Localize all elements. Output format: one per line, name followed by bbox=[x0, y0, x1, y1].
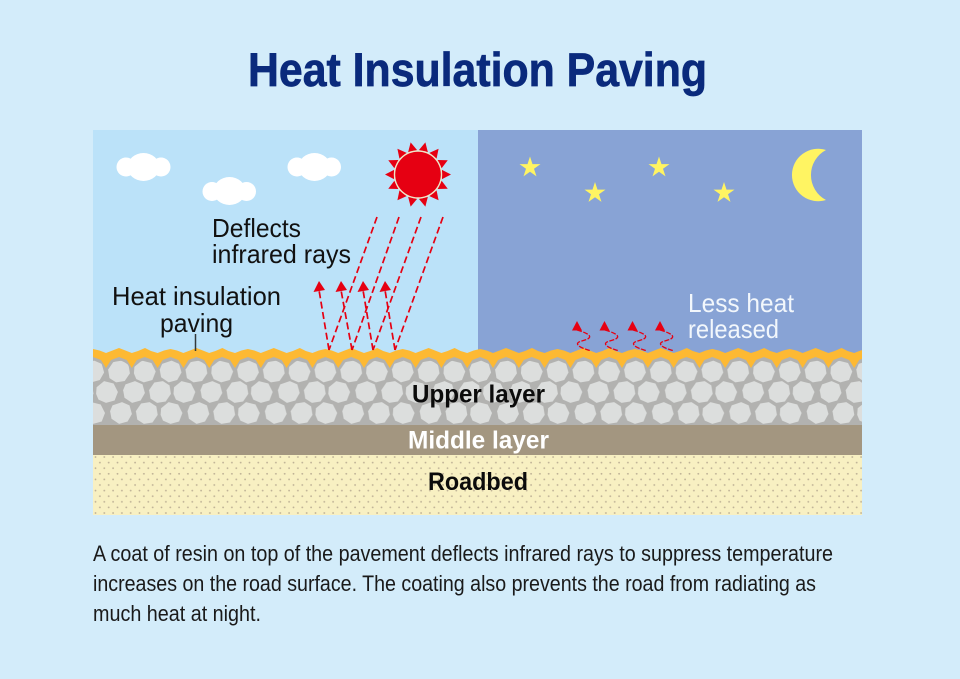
label: roadbed: Roadbed bbox=[428, 468, 528, 496]
title: Heat Insulation Paving bbox=[248, 44, 707, 97]
road middle layer band bbox=[93, 425, 862, 455]
icon: cloud right bbox=[288, 153, 341, 181]
label: less heat released bbox=[688, 288, 795, 344]
infographic canvas bbox=[93, 51, 862, 626]
arrows: incoming infrared rays bbox=[329, 217, 443, 350]
description text bbox=[93, 541, 833, 626]
panel: road cross-section diagram bbox=[28, 130, 880, 515]
label: less heat released: Less heat bbox=[688, 288, 795, 318]
label: upper layer: Upper layer bbox=[412, 380, 545, 408]
icon: cloud middle bbox=[202, 177, 256, 205]
label: deflects infrared rays: Deflects bbox=[212, 213, 301, 243]
leader line: coating label bbox=[194, 334, 196, 351]
arrows: deflected infrared rays bbox=[314, 281, 395, 350]
label: deflects infrared rays bbox=[212, 213, 351, 269]
icon: crescent moon bbox=[792, 149, 826, 201]
road upper layer: aggregate stones bbox=[93, 353, 862, 425]
heat insulation coating bbox=[93, 348, 862, 368]
roadbed band bbox=[93, 455, 862, 515]
description text: much heat at night. bbox=[93, 601, 261, 626]
icon: cloud left bbox=[116, 153, 170, 181]
icon: star 3 bbox=[648, 156, 670, 176]
icon: star 1 bbox=[520, 156, 540, 176]
label: heat insulation paving: paving bbox=[160, 308, 233, 338]
icon: sun bbox=[385, 141, 451, 208]
label: heat insulation paving bbox=[112, 281, 281, 338]
panel: night sky bbox=[478, 130, 862, 355]
description text: A coat of resin on top of the pavement deflects infrared rays to suppress temperature bbox=[93, 541, 833, 566]
arrows: night heat release bbox=[572, 321, 674, 351]
label: deflects infrared rays: infrared rays bbox=[212, 239, 351, 269]
icon: star 2 bbox=[584, 182, 606, 202]
description text: increases on the road surface. The coating also prevents the road from radiating as bbox=[93, 571, 816, 596]
label: less heat released: released bbox=[688, 314, 779, 344]
label: middle layer: Middle layer bbox=[408, 426, 549, 454]
label: heat insulation paving: Heat insulation bbox=[112, 281, 281, 311]
icon: star 4 bbox=[714, 182, 734, 202]
panel: daytime sky bbox=[93, 130, 478, 355]
